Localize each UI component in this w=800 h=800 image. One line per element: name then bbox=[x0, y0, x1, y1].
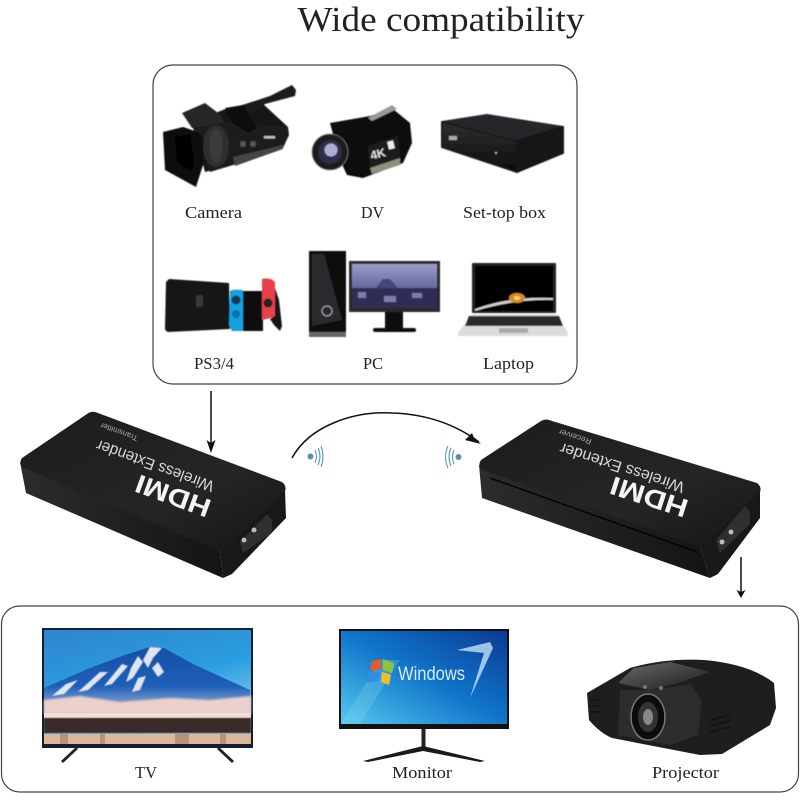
arrow: sources to transmitter bbox=[206, 391, 216, 453]
icon: projector bbox=[587, 660, 776, 755]
label: projector: Projector bbox=[652, 763, 719, 782]
icon: PC bbox=[309, 251, 440, 337]
text: Wireless Extender: Wireless Extender bbox=[94, 436, 217, 494]
panel: display devices bbox=[2, 606, 798, 792]
icon: DV: 4K bbox=[369, 145, 387, 163]
arrow: receiver to displays bbox=[736, 557, 746, 598]
icon: DV bbox=[312, 105, 412, 178]
text: Windows 7: Windows bbox=[398, 664, 465, 685]
icon: TV bbox=[42, 628, 253, 763]
label: monitor: Monitor bbox=[392, 763, 452, 782]
icon: laptop bbox=[458, 263, 568, 336]
icon: signal in bbox=[446, 446, 461, 468]
title: Wide compatibility bbox=[298, 1, 585, 39]
label: PC: PC bbox=[363, 354, 383, 373]
icon: monitor bbox=[339, 629, 509, 762]
arrow: wireless arc bbox=[292, 413, 481, 458]
logo: HDMI: HDMI bbox=[606, 470, 692, 524]
device: receiver bbox=[479, 420, 761, 578]
logo: HDMI: HDMI bbox=[131, 469, 215, 523]
label: set-top box: Set-top box bbox=[463, 203, 547, 222]
icon: game console bbox=[165, 278, 282, 332]
label: TV: TV bbox=[135, 763, 158, 782]
label: PS3/4: PS3/4 bbox=[194, 354, 234, 373]
icon: camera bbox=[163, 85, 296, 187]
panel: source devices bbox=[153, 65, 577, 384]
text: Transmitter: Transmitter bbox=[99, 421, 139, 442]
logo: Windows flag bbox=[367, 659, 394, 685]
device: transmitter bbox=[20, 412, 286, 578]
icon: signal out bbox=[308, 446, 323, 467]
text: Receiver: Receiver bbox=[557, 427, 593, 446]
label: laptop: Laptop bbox=[483, 354, 534, 373]
icon: set-top box bbox=[442, 115, 563, 172]
label: camera: Camera bbox=[185, 203, 242, 222]
label: DV: DV bbox=[361, 203, 385, 222]
text: Wireless Extender: Wireless Extender bbox=[557, 439, 687, 495]
